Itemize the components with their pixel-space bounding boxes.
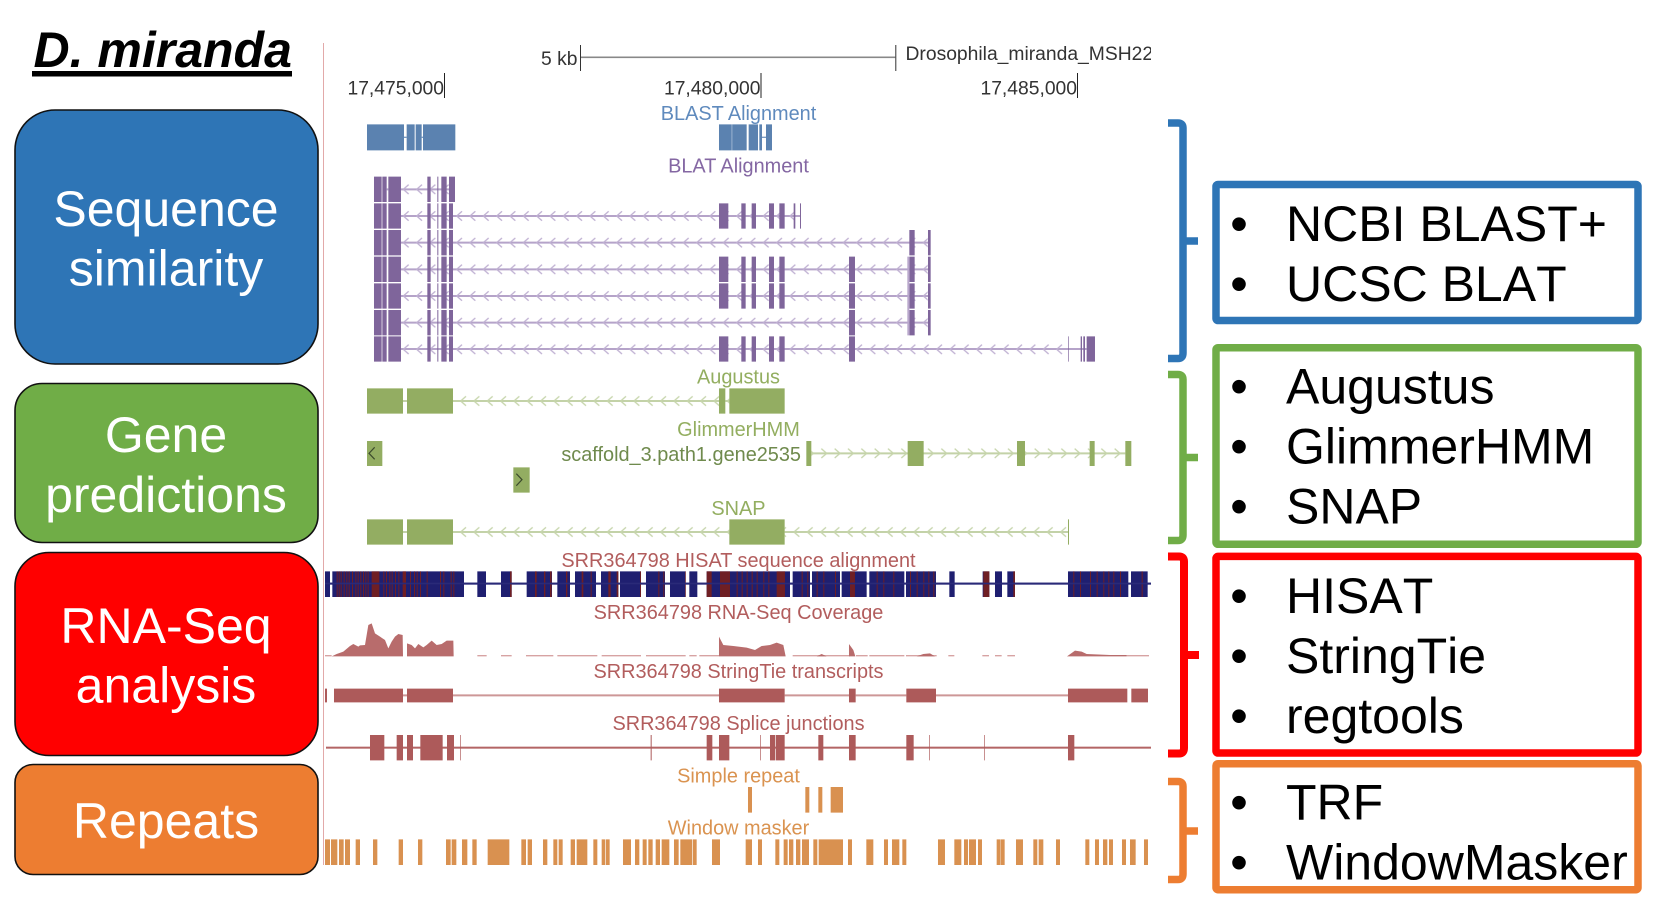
assembly name clipped: Drosophila_miranda_MSH22 bbox=[906, 44, 1153, 65]
panel: repeats category: Repeats bbox=[73, 793, 259, 849]
panel: RNA-Seq analysis category bbox=[15, 552, 318, 756]
track: StringTie transcripts bbox=[325, 689, 1148, 702]
panel: gene prediction tools bbox=[1216, 348, 1638, 544]
brace: repeats bbox=[1168, 782, 1198, 880]
track: BLAST alignment bbox=[367, 124, 772, 150]
panel: gene prediction tools: • bbox=[1230, 478, 1248, 534]
track: BLAT alignment transcripts bbox=[374, 177, 1095, 362]
scale bar: 5 kb: 5 kb bbox=[541, 49, 577, 70]
track label: RNA-Seq Coverage: SRR364798 RNA-Seq Coverage bbox=[594, 602, 883, 624]
panel: gene predictions category: Gene bbox=[105, 407, 227, 463]
panel: repeat tools bbox=[1216, 764, 1638, 890]
track: window masker bbox=[325, 839, 1148, 865]
brace: sequence similarity bbox=[1168, 123, 1198, 358]
track label: Splice junctions: SRR364798 Splice junctions bbox=[612, 713, 865, 735]
track: SNAP gene prediction bbox=[367, 519, 1069, 545]
panel: RNA-Seq tools: StringTie bbox=[1286, 628, 1486, 684]
panel: sequence similarity tools: • bbox=[1230, 196, 1248, 252]
gene label: scaffold_3.path1.gene2535: scaffold_3.path1.gene2535 bbox=[561, 444, 801, 466]
panel: sequence similarity tools: • bbox=[1230, 256, 1248, 312]
brace: RNA-Seq analysis bbox=[1168, 556, 1199, 754]
panel: repeat tools: TRF bbox=[1286, 774, 1383, 830]
track label: GlimmerHMM: GlimmerHMM bbox=[677, 419, 800, 441]
panel: sequence similarity category: Sequence bbox=[53, 181, 279, 237]
track label: Window masker: Window masker bbox=[668, 818, 810, 840]
panel: RNA-Seq tools: HISAT bbox=[1286, 568, 1433, 624]
track label: BLAT Alignment: BLAT Alignment bbox=[668, 156, 809, 178]
track: HISAT sequence alignment bbox=[325, 571, 1151, 597]
panel: RNA-Seq tools: • bbox=[1230, 568, 1248, 624]
coordinate axis: 17,485,000 bbox=[980, 78, 1077, 100]
panel: gene prediction tools: • bbox=[1230, 418, 1248, 474]
panel: sequence similarity category: similarity bbox=[69, 240, 263, 296]
panel: RNA-Seq analysis category: analysis bbox=[76, 658, 256, 714]
panel: gene predictions category: predictions bbox=[45, 467, 287, 523]
track label: Simple repeat: Simple repeat bbox=[677, 766, 800, 788]
track label: BLAST Alignment: BLAST Alignment bbox=[661, 103, 817, 125]
panel: repeat tools: • bbox=[1230, 774, 1248, 830]
panel: gene predictions category bbox=[15, 384, 318, 542]
panel: repeat tools: WindowMasker bbox=[1286, 834, 1628, 890]
panel: repeat tools: • bbox=[1230, 834, 1248, 890]
track: RNA-Seq coverage bbox=[325, 623, 1149, 656]
track label: Augustus: Augustus bbox=[697, 366, 780, 388]
coordinate axis: 17,475,000 bbox=[347, 78, 444, 100]
panel: gene prediction tools: GlimmerHMM bbox=[1286, 418, 1594, 474]
track: Augustus gene prediction bbox=[367, 388, 785, 414]
panel: RNA-Seq tools: • bbox=[1230, 688, 1248, 744]
panel: gene prediction tools: SNAP bbox=[1286, 478, 1422, 534]
genome browser left edge line bbox=[323, 43, 324, 865]
panel: gene prediction tools: Augustus bbox=[1286, 358, 1494, 414]
panel: sequence similarity tools: UCSC BLAT bbox=[1286, 256, 1567, 312]
track: simple repeat bbox=[748, 787, 843, 813]
brace: gene predictions bbox=[1168, 374, 1198, 540]
panel: RNA-Seq tools: • bbox=[1230, 628, 1248, 684]
panel: sequence similarity category bbox=[15, 110, 318, 364]
panel: RNA-Seq tools: regtools bbox=[1286, 688, 1464, 744]
track: splice junctions bbox=[326, 735, 1151, 760]
track label: HISAT sequence alignment: SRR364798 HISAT sequence alignment bbox=[561, 550, 916, 572]
track: GlimmerHMM gene prediction bbox=[367, 441, 1131, 493]
track label: SNAP: SNAP bbox=[711, 498, 766, 520]
coordinate axis bbox=[347, 73, 1078, 100]
panel: RNA-Seq tools bbox=[1216, 556, 1638, 753]
track label: StringTie transcripts: SRR364798 StringTie transcripts bbox=[593, 661, 884, 683]
panel: RNA-Seq analysis category: RNA-Seq bbox=[60, 598, 272, 654]
panel: sequence similarity tools: NCBI BLAST+ bbox=[1286, 196, 1607, 252]
panel: gene prediction tools: • bbox=[1230, 358, 1248, 414]
panel: repeats category bbox=[15, 764, 318, 874]
panel: sequence similarity tools bbox=[1216, 184, 1638, 320]
coordinate axis: 17,480,000 bbox=[664, 78, 760, 100]
title: D. miranda bbox=[34, 22, 292, 78]
